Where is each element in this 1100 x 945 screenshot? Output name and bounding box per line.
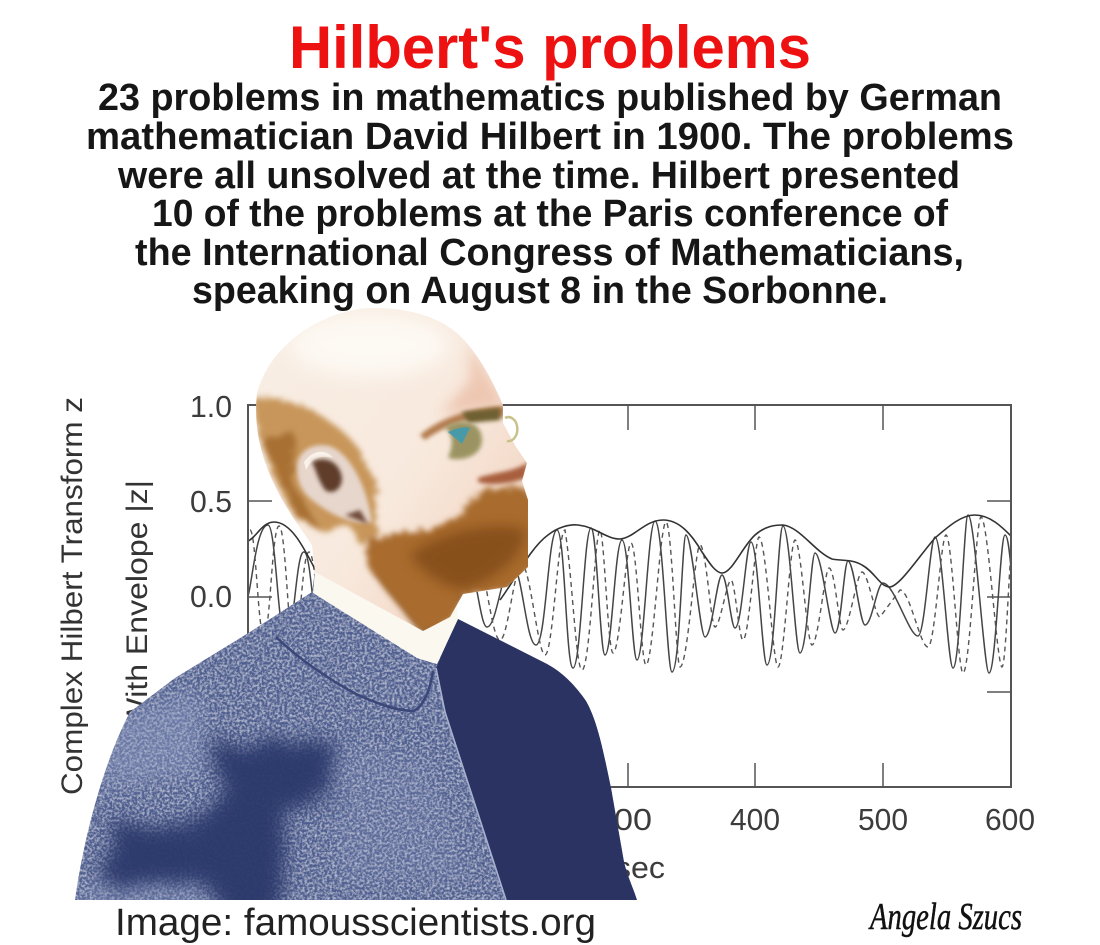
forehead edge tint (440, 345, 505, 415)
image credit: Image: famousscientists.org (115, 902, 596, 944)
intro text block: the International Congress of Mathematicians, (135, 232, 964, 274)
forehead highlight (290, 313, 450, 377)
y axis title: With Envelope |z| (121, 480, 154, 728)
x axis tick labels: t sec (597, 850, 665, 885)
intro text block: were all unsolved at the time. Hilbert presented (117, 155, 960, 197)
solid carrier wave (246, 515, 1013, 673)
plot frame and ticks (248, 405, 1011, 787)
intro text block: mathematician David Hilbert in 1900. The problems (86, 116, 1014, 158)
intro text block (86, 77, 1014, 312)
white shirt collar (313, 570, 458, 664)
neck shadow (375, 570, 465, 635)
jacket (75, 572, 637, 900)
spectacles (505, 417, 517, 441)
x axis tick labels: 400 (730, 802, 780, 837)
ear (297, 445, 372, 524)
dark front panel (436, 617, 645, 900)
y axis tick labels (190, 389, 232, 614)
jacket cloth (70, 565, 645, 901)
collar seam (276, 637, 433, 711)
beard (365, 487, 535, 634)
jacket shadows (105, 738, 335, 930)
hair (254, 397, 376, 545)
head (256, 308, 528, 631)
dashed quadrature wave (250, 517, 1012, 673)
intro text block: speaking on August 8 in the Sorbonne. (192, 270, 888, 312)
y axis tick labels: 0.0 (190, 579, 232, 614)
lens reflection (448, 427, 470, 444)
envelope curve (248, 515, 1012, 600)
y axis tick labels: 0.5 (190, 484, 232, 519)
front seam (436, 668, 506, 900)
y axis title: Complex Hilbert Transform z (56, 397, 89, 795)
x axis tick labels: 500 (858, 802, 908, 837)
intro text block: 10 of the problems at the Paris conference of (152, 193, 948, 235)
skin (256, 308, 528, 631)
beard shadow (410, 526, 525, 590)
brow shadow (462, 408, 500, 423)
eyebrow (420, 406, 505, 440)
eye socket (445, 422, 482, 459)
nose shadow (478, 462, 528, 484)
y axis title (56, 397, 154, 795)
x axis tick labels: 600 (985, 802, 1035, 837)
x axis tick labels (595, 802, 1035, 885)
y axis tick labels: 1.0 (190, 389, 232, 424)
chart: complex Hilbert transform with envelope (56, 389, 1035, 885)
portrait of David Hilbert (70, 300, 645, 930)
jacket light patches (80, 690, 470, 905)
title: Hilbert's problems (289, 14, 811, 81)
x axis tick labels: 300 (595, 802, 652, 837)
signature: Angela Szucs (868, 896, 1022, 938)
intro text block: 23 problems in mathematics published by German (98, 77, 1002, 119)
